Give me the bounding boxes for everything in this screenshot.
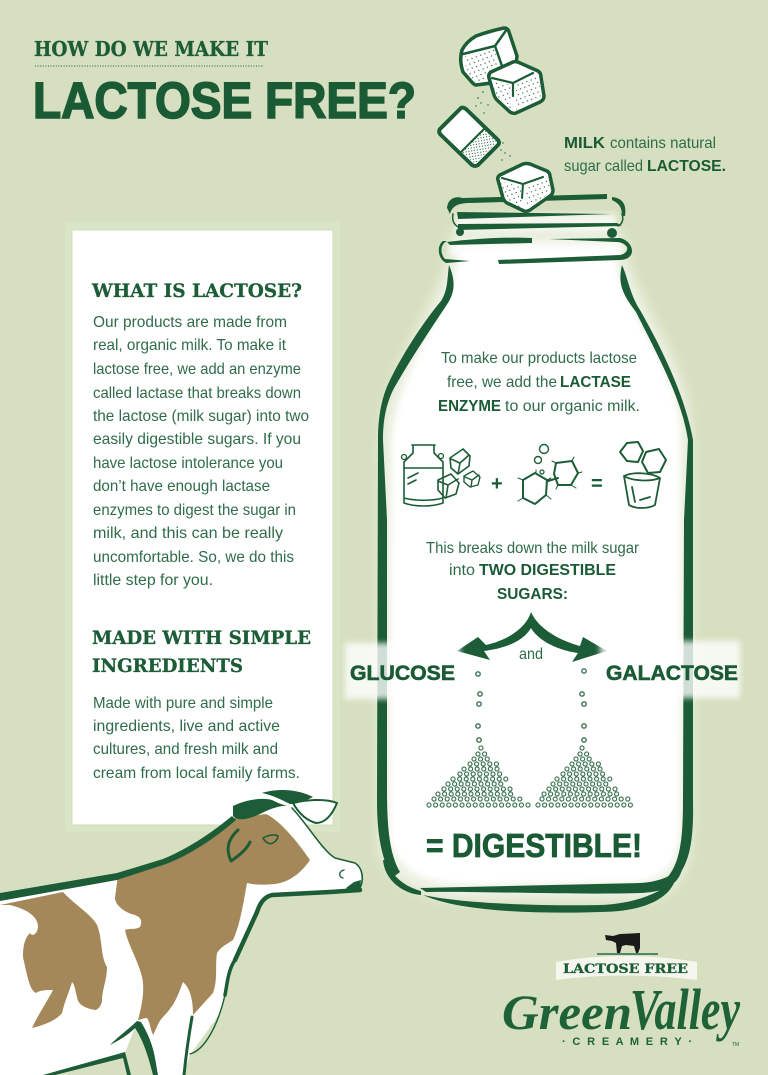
brown patch front <box>115 814 310 1035</box>
falling sugar cubes <box>439 28 553 211</box>
cow outline <box>0 808 362 1075</box>
bottle glow <box>379 232 691 900</box>
heading: made with simple ingredients: INGREDIENTS <box>92 655 243 677</box>
icon: cup with hexagons <box>620 442 666 508</box>
cube 4 <box>498 164 553 211</box>
and arrows <box>457 612 607 662</box>
left wall <box>377 265 454 878</box>
text: two digestible sugars: into <box>449 562 475 579</box>
equation icons <box>402 442 666 508</box>
heading: made with simple ingredients <box>92 627 311 677</box>
logo: green valley creamery <box>502 933 740 1048</box>
band: glucose <box>345 643 460 699</box>
trademark: TM <box>732 1042 739 1048</box>
ribbon <box>556 956 697 980</box>
text: lactase enzyme: To make our products lactose <box>441 350 637 367</box>
body text: what is lactose: Our products are made from <box>93 314 287 331</box>
title <box>33 37 416 129</box>
title: LACTOSE FREE? <box>33 72 416 129</box>
body text: what is lactose: easily digestible sugars. If you <box>93 431 301 448</box>
sugar grains <box>475 91 511 161</box>
text: lactase enzyme: free, we add the <box>447 374 557 391</box>
panel: what is lactose <box>65 222 340 832</box>
right wall <box>620 265 693 892</box>
cube 1 <box>461 28 517 85</box>
cow ear <box>293 800 337 823</box>
digestible result: = DIGESTIBLE! <box>426 827 642 864</box>
callout: milk contains lactose: LACTOSE. <box>647 158 726 175</box>
body text: ingredients: cultures, and fresh milk and <box>93 741 278 758</box>
text: two digestible sugars: TWO DIGESTIBLE <box>479 562 616 579</box>
body text: ingredients: Made with pure and simple <box>93 695 273 712</box>
brown patch rear <box>0 892 107 1028</box>
bottle rim <box>439 194 632 264</box>
title: HOW DO WE MAKE IT <box>34 37 269 61</box>
cube 2 <box>489 62 544 113</box>
text: lactase enzyme <box>438 350 640 415</box>
bottle bottom <box>383 860 683 913</box>
body text: what is lactose: called lactase that breaks down <box>93 385 301 402</box>
text: two digestible sugars: This breaks down the milk sugar <box>426 540 640 557</box>
body text: ingredients: ingredients, live and active <box>93 718 280 735</box>
cow body <box>0 808 362 1075</box>
sugar pile left <box>429 748 530 805</box>
bottle interior <box>390 250 680 884</box>
callout: milk contains lactose <box>564 135 726 175</box>
label: galactose: GALACTOSE <box>606 662 738 685</box>
falling circles <box>476 669 586 742</box>
icon: cubes <box>438 449 480 498</box>
text: two digestible sugars <box>426 540 640 603</box>
script wordmark: Green <box>502 984 632 1040</box>
equals: = <box>591 473 603 495</box>
text: two digestible sugars: SUGARS: <box>497 586 568 603</box>
heading: made with simple ingredients: MADE WITH SIMPLE <box>92 627 311 649</box>
label: glucose: GLUCOSE <box>350 662 455 685</box>
text: lactase enzyme: ENZYME <box>438 398 501 415</box>
body text: what is lactose: uncomfortable. So, we do this <box>93 549 294 566</box>
script wordmark <box>502 977 740 1042</box>
body text: what is lactose: don’t have enough lactase <box>93 478 270 495</box>
ribbon text: LACTOSE FREE <box>563 962 688 977</box>
logo cow <box>597 933 658 954</box>
band: galactose <box>600 641 740 698</box>
sugar pile right <box>538 748 636 805</box>
cow <box>0 790 362 1075</box>
milk bottle <box>377 194 693 913</box>
body text: what is lactose: have lactose intolerance you <box>93 455 283 472</box>
label: and: and <box>519 646 543 663</box>
body text: what is lactose <box>93 314 309 589</box>
neck highlight <box>450 214 622 256</box>
text: lactase enzyme: LACTASE <box>560 374 631 391</box>
body text: what is lactose: the lactose (milk sugar) into two <box>93 408 309 425</box>
body text: what is lactose: milk, and this can be really <box>93 525 283 542</box>
cow face <box>228 830 361 892</box>
cow forelock <box>233 790 313 819</box>
callout: milk contains lactose: MILK <box>564 135 605 152</box>
body text: ingredients: cream from local family farms. <box>93 765 300 782</box>
text: lactase enzyme: to our organic milk. <box>505 398 640 415</box>
heading: what is lactose: WHAT IS LACTOSE? <box>91 280 302 302</box>
body text: what is lactose: little step for you. <box>93 572 213 589</box>
callout: milk contains lactose: contains natural <box>610 135 716 152</box>
plus: + <box>491 473 503 495</box>
body text: what is lactose: real, organic milk. To make it <box>93 337 287 354</box>
cube 3 <box>439 108 499 166</box>
body text: what is lactose: enzymes to digest the sugar in <box>93 502 296 519</box>
body text: what is lactose: lactose free, we add an enzyme <box>93 361 301 378</box>
creamery: · C R E A M E R Y · <box>562 1036 692 1048</box>
icon: lactase molecule <box>518 444 582 504</box>
body text: ingredients <box>93 695 300 782</box>
callout: milk contains lactose: sugar called <box>564 158 643 175</box>
icon: milk can <box>402 445 444 506</box>
